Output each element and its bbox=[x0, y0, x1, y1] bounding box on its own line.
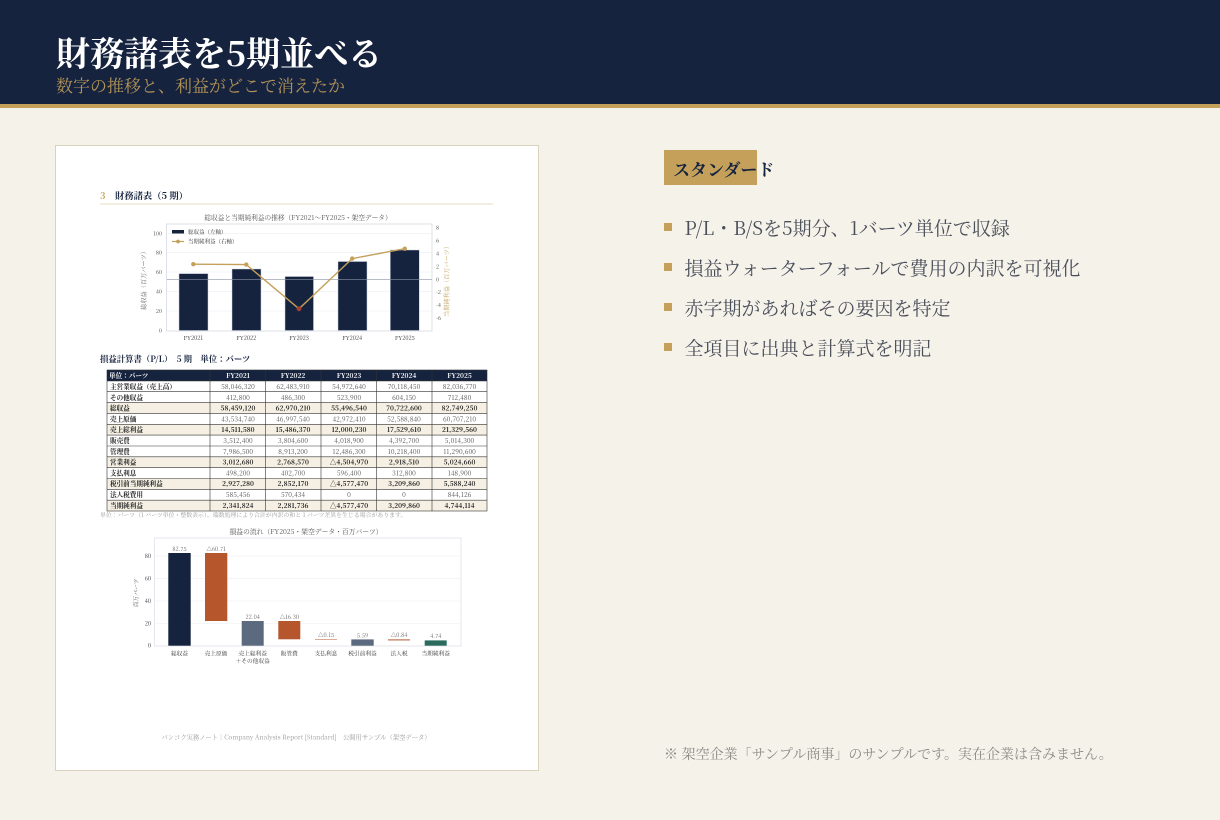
x axis labels: FY2021 bbox=[184, 334, 203, 342]
right axis: 2 bbox=[436, 262, 439, 270]
table: income statement: 70,118,450 bbox=[388, 381, 421, 391]
y axis: 20 bbox=[145, 619, 151, 627]
right axis bbox=[436, 224, 441, 322]
x labels: 支払利息 bbox=[315, 648, 338, 658]
feature list bbox=[664, 214, 1080, 361]
table: income statement: 43,534,740 bbox=[221, 414, 255, 424]
x labels bbox=[171, 648, 450, 665]
right axis: -6 bbox=[436, 314, 441, 322]
feature list: 赤字期があればその要因を特定 bbox=[684, 294, 951, 321]
bars bbox=[179, 250, 419, 330]
table: income statement: 60,707,210 bbox=[443, 414, 476, 424]
left axis bbox=[153, 230, 162, 334]
feature list: P/L・B/Sを5期分、1バーツ単位で収録 bbox=[684, 214, 1010, 241]
table: income statement: 570,434 bbox=[281, 489, 305, 499]
section heading bbox=[100, 188, 493, 204]
x axis labels: FY2022 bbox=[236, 334, 256, 342]
value labels: 82.75 bbox=[172, 545, 187, 553]
left axis: 20 bbox=[156, 307, 162, 315]
waterfall chart: 百万バーツ bbox=[131, 579, 140, 607]
table: income statement: 412,800 bbox=[226, 392, 250, 402]
table: income statement: 単位：バーツ bbox=[109, 370, 148, 380]
value labels: △0.84 bbox=[391, 631, 407, 639]
x labels: ＋その他収益 bbox=[236, 656, 270, 665]
table: income statement: 5,014,300 bbox=[445, 435, 475, 445]
table: income statement: △4,504,970 bbox=[330, 456, 368, 466]
table: income statement: 5,024,660 bbox=[444, 456, 475, 466]
table heading: 損益計算書（P/L） 5 期 単位：バーツ bbox=[100, 353, 250, 365]
combo chart: revenue and net income: 総収益（百万バーツ） bbox=[139, 248, 148, 310]
legend bbox=[172, 230, 184, 234]
table: income statement: 8,913,200 bbox=[278, 446, 308, 456]
table: income statement: 0 bbox=[347, 489, 351, 499]
table: income statement: 42,972,410 bbox=[332, 414, 366, 424]
x axis labels: FY2023 bbox=[289, 334, 309, 342]
right axis: 0 bbox=[436, 275, 439, 283]
x labels: 税引前利益 bbox=[348, 648, 377, 658]
table: income statement: 2,768,570 bbox=[277, 456, 309, 466]
table: income statement: 498,200 bbox=[226, 468, 250, 478]
table: income statement: 販売費 bbox=[110, 435, 131, 445]
table: income statement: 3,209,860 bbox=[388, 478, 420, 488]
page footer: バンコク実務ノート｜Company Analysis Report [Standard] 公開用サンプル（架空データ） bbox=[161, 732, 431, 742]
table: income statement: 12,486,300 bbox=[332, 446, 366, 456]
waterfall chart: 損益の流れ（FY2025・架空データ・百万バーツ） bbox=[230, 526, 382, 536]
table: income statement: 55,496,540 bbox=[331, 402, 367, 412]
x labels: 総収益 bbox=[171, 648, 188, 658]
table: income statement: 54,972,640 bbox=[332, 381, 366, 391]
x axis labels: FY2024 bbox=[342, 334, 362, 342]
left axis: 40 bbox=[156, 288, 162, 296]
table: income statement: 604,150 bbox=[392, 392, 416, 402]
combo chart: revenue and net income bbox=[139, 212, 451, 342]
x labels: 当期純利益 bbox=[421, 648, 450, 658]
table: income statement: 主営業収益（売上高） bbox=[110, 381, 176, 391]
table: income statement: 営業利益 bbox=[110, 456, 137, 466]
y axis: 0 bbox=[148, 642, 151, 650]
header band bbox=[0, 0, 1220, 108]
table: income statement: FY2024 bbox=[392, 370, 416, 380]
x labels: 販管費 bbox=[281, 648, 298, 658]
table: income statement: 4,744,114 bbox=[444, 500, 475, 510]
table: income statement: 総収益 bbox=[110, 402, 130, 412]
disclaimer note: ※ 架空企業「サンプル商事」のサンプルです。実在企業は含みません。 bbox=[664, 744, 1113, 764]
table: income statement: 70,722,600 bbox=[386, 402, 422, 412]
value labels: △60.71 bbox=[206, 545, 226, 553]
table: income statement: 11,290,600 bbox=[443, 446, 476, 456]
right axis: 6 bbox=[436, 237, 439, 245]
y axis: 80 bbox=[145, 552, 151, 560]
table: income statement: 10,218,400 bbox=[388, 446, 421, 456]
table: income statement: 3,804,600 bbox=[278, 435, 308, 445]
table: income statement: FY2023 bbox=[337, 370, 361, 380]
table: income statement: 402,700 bbox=[281, 468, 305, 478]
table: income statement: 3,209,860 bbox=[388, 500, 420, 510]
table: income statement: 12,000,230 bbox=[332, 424, 367, 434]
panel: report page preview bbox=[55, 145, 539, 771]
left axis: 100 bbox=[153, 230, 162, 238]
table: income statement: 法人税費用 bbox=[110, 489, 143, 499]
net income line bbox=[193, 249, 405, 309]
table: income statement: 21,329,560 bbox=[442, 424, 477, 434]
table: income statement: 46,997,540 bbox=[276, 414, 310, 424]
table: income statement: 15,486,370 bbox=[276, 424, 311, 434]
waterfall bars bbox=[168, 553, 191, 646]
table: income statement: △4,577,470 bbox=[330, 478, 368, 488]
left axis: 80 bbox=[156, 248, 162, 256]
table: income statement: 4,018,900 bbox=[334, 435, 364, 445]
table: income statement: △4,577,470 bbox=[330, 500, 368, 510]
table: income statement: 82,749,250 bbox=[442, 402, 477, 412]
table: income statement: 58,459,120 bbox=[221, 402, 256, 412]
combo chart: revenue and net income: 当期純利益（百万バーツ） bbox=[442, 243, 451, 317]
table: income statement: 2,341,824 bbox=[223, 500, 254, 510]
table: income statement: 17,529,610 bbox=[387, 424, 421, 434]
table: income statement: 当期純利益 bbox=[110, 500, 143, 510]
table: income statement: 2,281,736 bbox=[278, 500, 309, 510]
table: income statement: 5,588,240 bbox=[444, 478, 475, 488]
x axis labels bbox=[184, 334, 415, 342]
feature list: 全項目に出典と計算式を明記 bbox=[684, 334, 932, 361]
badge: standard: スタンダード bbox=[673, 156, 774, 181]
table: income statement: 3,012,680 bbox=[223, 456, 254, 466]
section heading: 財務諸表（5 期） bbox=[115, 188, 188, 202]
table: income statement: 売上原価 bbox=[110, 414, 137, 424]
table: income statement: 支払利息 bbox=[110, 468, 137, 478]
value labels: △16.30 bbox=[280, 613, 299, 621]
table: income statement: FY2021 bbox=[226, 370, 250, 380]
y axis: 40 bbox=[145, 597, 151, 605]
section heading: 3 bbox=[100, 188, 106, 202]
y axis: 60 bbox=[145, 574, 151, 582]
title: 財務諸表を5期並べる bbox=[56, 27, 382, 76]
feature list: 損益ウォーターフォールで費用の内訳を可視化 bbox=[684, 254, 1080, 281]
table: income statement: FY2022 bbox=[281, 370, 305, 380]
table: income statement: 0 bbox=[402, 489, 406, 499]
table: income statement: 523,900 bbox=[337, 392, 361, 402]
x axis labels: FY2025 bbox=[395, 334, 415, 342]
table: income statement: 148,900 bbox=[448, 468, 472, 478]
table: income statement: 312,800 bbox=[392, 468, 416, 478]
combo chart: revenue and net income: 総収益（左軸） bbox=[188, 228, 227, 236]
table: income statement: 2,927,280 bbox=[222, 478, 254, 488]
combo chart: revenue and net income: 当期純利益（右軸） bbox=[188, 238, 238, 246]
value labels: 22.04 bbox=[246, 613, 260, 621]
table: income statement: 82,036,770 bbox=[443, 381, 477, 391]
right axis: -4 bbox=[436, 301, 441, 309]
table: income statement: 52,588,840 bbox=[387, 414, 421, 424]
combo chart: revenue and net income: 総収益と当期純利益の推移（FY2021〜FY2025・架空データ） bbox=[204, 212, 392, 222]
right axis: 4 bbox=[436, 250, 439, 258]
x labels: 売上原価 bbox=[205, 648, 228, 658]
left axis: 60 bbox=[156, 268, 162, 276]
table: income statement: 14,511,580 bbox=[221, 424, 255, 434]
value labels: 5.59 bbox=[357, 632, 368, 640]
table: income statement: 2,918,510 bbox=[389, 456, 419, 466]
table: income statement: 585,456 bbox=[226, 489, 250, 499]
left axis: 0 bbox=[159, 326, 162, 334]
value labels: 4.74 bbox=[430, 632, 441, 640]
table: income statement: 2,852,170 bbox=[278, 478, 309, 488]
right axis: 8 bbox=[436, 224, 439, 232]
table: income statement: その他収益 bbox=[110, 392, 143, 402]
table: income statement: 486,300 bbox=[281, 392, 305, 402]
table: income statement: 3,512,400 bbox=[223, 435, 253, 445]
table: income statement: FY2025 bbox=[447, 370, 472, 380]
table: income statement: 売上総利益 bbox=[110, 424, 143, 434]
table: income statement: 712,480 bbox=[448, 392, 472, 402]
table: income statement: 税引前当期純利益 bbox=[110, 478, 163, 488]
gold rule bbox=[0, 104, 1220, 108]
x labels: 法人税 bbox=[390, 648, 408, 658]
table: income statement bbox=[107, 370, 487, 511]
table: income statement: 58,046,320 bbox=[221, 381, 255, 391]
y axis bbox=[145, 552, 151, 650]
table: income statement: 7,986,500 bbox=[223, 446, 253, 456]
table: income statement: 4,392,700 bbox=[389, 435, 419, 445]
table: income statement: 62,483,910 bbox=[276, 381, 310, 391]
x labels: 売上総利益 bbox=[238, 648, 267, 658]
table note: 単位：バーツ（1 バーツ単位・整数表示）。端数処理により合計が内訳の和と 1 バーツ差異を生じる場合があります。 bbox=[100, 510, 406, 519]
right axis: -2 bbox=[436, 288, 441, 296]
subtitle: 数字の推移と、利益がどこで消えたか bbox=[56, 72, 345, 97]
table: income statement: 62,970,210 bbox=[276, 402, 311, 412]
table: income statement: 管理費 bbox=[110, 446, 131, 456]
table: income statement: 596,400 bbox=[337, 468, 361, 478]
table: income statement: 844,126 bbox=[448, 489, 472, 499]
waterfall chart bbox=[131, 526, 461, 665]
value labels: △0.15 bbox=[318, 631, 334, 639]
badge: standard bbox=[664, 150, 757, 185]
value labels bbox=[172, 545, 441, 640]
